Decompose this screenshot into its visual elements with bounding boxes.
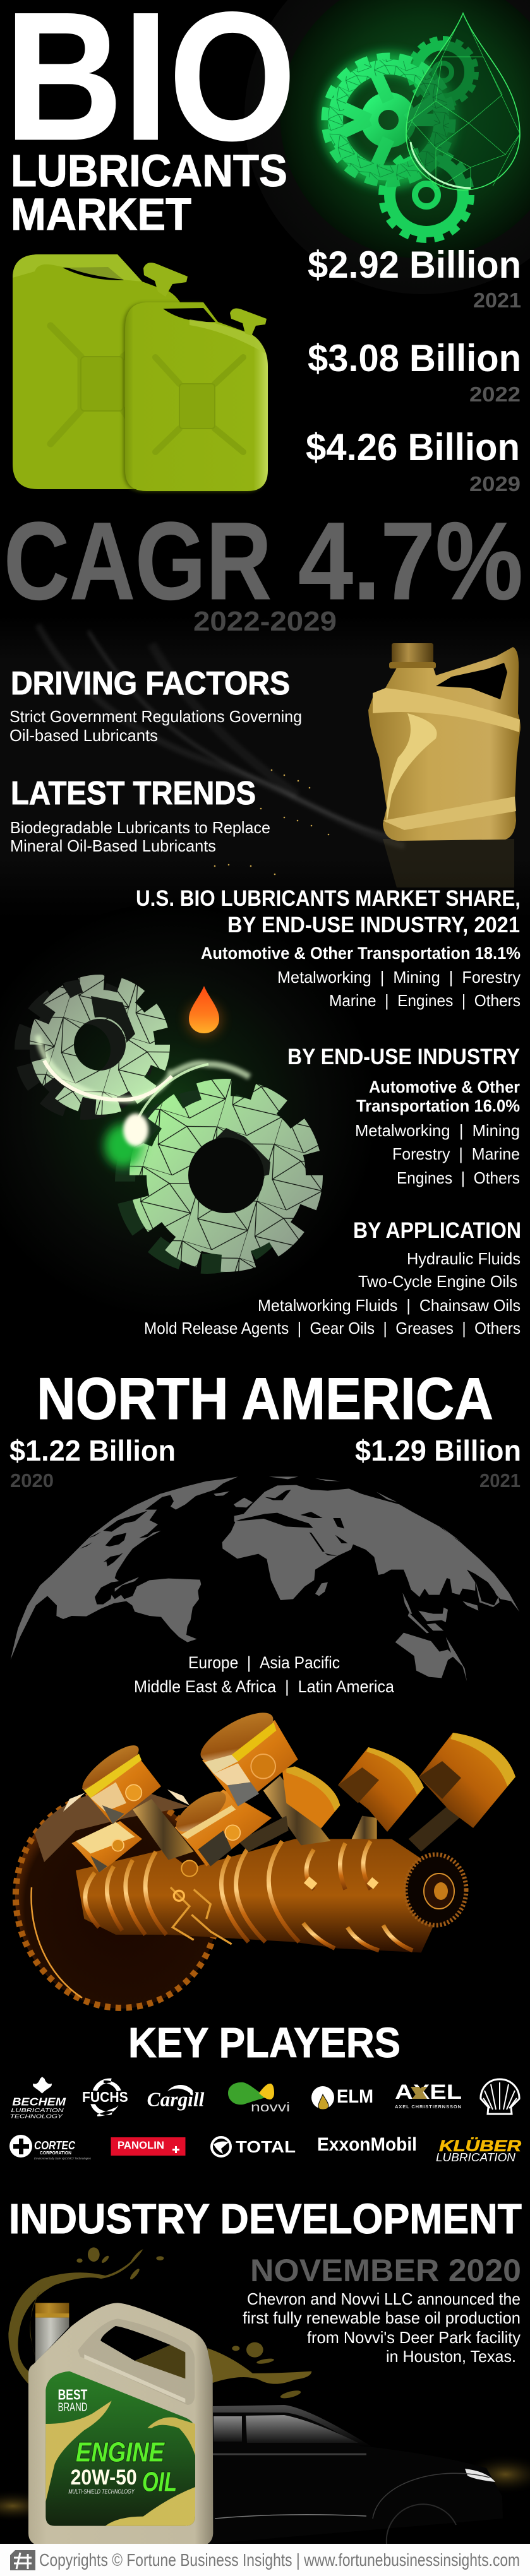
text: other regions: Middle East & Africa | Latin America [134,1677,395,1696]
logo: Kluber Lubrication: LUBRICATION [436,2151,516,2164]
market size 2022: 2022 [469,383,521,406]
decorative backdrop curtain [0,615,530,918]
panel: by end-use industry: Engines | Others [397,1168,520,1187]
bottle body [28,2303,213,2546]
CAGR period: 2022-2029 [193,606,337,637]
text: development description: in Houston, Texas. [386,2347,516,2366]
panel: driving factors: DRIVING FACTORS [11,665,290,702]
stat: North America 2020: $1.22 Billion [9,1434,176,1467]
piston centre [170,1784,272,1867]
logo: Kluber Lubrication [436,2137,521,2164]
logo: Shell [481,2079,519,2114]
logo: Cortec: CORTEC [34,2139,76,2152]
logo: Kluber Lubrication: KLÜBER [439,2137,521,2155]
text: November 2020: NOVEMBER 2020 [250,2253,521,2288]
logo: Bechem: TECHNOLOGY [10,2113,63,2119]
illustration: car silhouette [0,2405,530,2544]
logo: Cargill: Cargill [147,2088,204,2111]
market size 2022: $3.08 Billion [308,337,521,379]
logo: Total: TOTAL [236,2137,296,2156]
logo: Bechem [10,2077,66,2119]
text: development description [243,2289,521,2366]
text: U.S. share breakdown: Metalworking | Mining | Forestry [277,968,521,987]
crankshaft and connecting rods [76,1776,474,1952]
logo: ELM [311,2086,373,2110]
panel: by application: Hydraulic Fluids [407,1249,521,1268]
heading: U.S. market share [136,886,521,937]
piston small left [71,1821,142,1873]
logo: Fuchs: FUCHS [82,2089,128,2105]
bottle label: OIL [142,2467,177,2498]
panel: by end-use industry: Metalworking | Mining [355,1121,520,1140]
illustration: golden engine crankshaft and pistons [0,1704,515,2035]
text: U.S. share breakdown [201,944,521,1010]
panel: latest trends: LATEST TRENDS [11,775,256,812]
panel: by application: Two-Cycle Engine Oils [358,1272,517,1291]
panel: by application [144,1218,521,1338]
logo: ELM: ELM [337,2086,373,2107]
logo: Axel Christiernsson: AXEL CHRISTIERNSSON [395,2104,461,2110]
pistons [71,1704,515,1873]
glow and mesh gears backdrop [0,903,379,1319]
text: other regions: Europe | Asia Pacific [188,1653,340,1672]
text: development description: from Novvi's Deer Park facility [307,2328,521,2347]
illustration: gold oil bottle [368,643,521,887]
title: MARKET: MARKET [11,190,191,240]
logo: Cortec [9,2135,92,2160]
market size 2029: 2029 [469,472,521,496]
bottle label: MULTI-SHIELD TECHNOLOGY [68,2489,135,2496]
logo: ExxonMobil: ExxonMobil [317,2134,417,2155]
panel: latest trends: Biodegradable Lubricants to Replace [10,818,270,837]
panel: by end-use industry: Forestry | Marine [392,1144,520,1163]
panel: latest trends: Mineral Oil-Based Lubricants [10,836,216,855]
logo: Panolin: PANOLIN [117,2139,164,2151]
logo: Bechem: LUBRICATION [11,2108,64,2113]
panel: driving factors [9,665,302,745]
stat: North America 2021: $1.29 Billion [355,1434,521,1467]
illustration: glowing gears and oil drop [244,0,530,294]
piston far right B [419,1733,515,1828]
glowing arc highlight [38,1035,250,1167]
stat: North America 2020 [9,1434,176,1492]
panel: by end-use industry: Automotive & Other [369,1077,520,1096]
illustration: engine oil bottle with splash [8,2247,311,2546]
stat: North America 2020: 2020 [10,1469,54,1492]
bottle label: BRAND [58,2400,87,2413]
logo: Axel Christiernsson: AXEL [395,2080,462,2103]
illustration: small green jerry can [123,302,268,492]
sprocket disk [0,1766,246,2035]
bottle label: 20W-50 [71,2466,137,2490]
heading: North America: NORTH AMERICA [37,1365,493,1432]
logo: Novvi [228,2082,290,2115]
text: U.S. share breakdown: Marine | Engines | Others [329,991,521,1010]
piston top [194,1704,298,1807]
logo: Axel Christiernsson [395,2080,462,2110]
footer bar [0,2544,530,2576]
illustration: low-poly gear pair [15,975,323,1274]
market size 2021 [308,244,521,312]
market size 2021: 2021 [473,288,521,312]
bottle label [45,2371,195,2526]
piston left [76,1738,161,1824]
market size 2029: $4.26 Billion [306,426,520,468]
title: LUBRICANTS: LUBRICANTS [11,146,287,196]
stat: North America 2021: 2021 [479,1469,521,1492]
map: world globe [11,1476,519,1681]
market size 2021: $2.92 Billion [308,244,521,286]
market size 2022 [308,337,521,406]
piston far right A [338,1747,424,1832]
text: development description: first fully renewable base oil production [243,2308,521,2327]
logo: Cortec: CORPORATION [40,2151,71,2156]
oil splash [8,2247,311,2400]
bottle label: ENGINE [76,2437,165,2467]
bottle label: BEST [58,2387,87,2403]
CAGR heading: CAGR [4,500,272,623]
text: development description: Chevron and Novvi LLC announced the [247,2289,521,2308]
logo: Bechem: BECHEM [12,2096,66,2108]
panel: by end-use industry [287,1045,520,1187]
panel: latest trends [10,775,270,855]
panel: by end-use industry: Transportation 16.0% [356,1096,520,1115]
panel: driving factors: Strict Government Regulations Governing [9,707,302,726]
bottle cap and neck [35,2303,69,2363]
illustration: large green jerry can [13,254,190,489]
piston behind centre [282,1766,340,1829]
market size 2029 [306,426,521,496]
logo: Cortec: Environmentally Safe VpCI/MCI Technologies [34,2157,92,2160]
panel: by application: Metalworking Fluids | Chainsaw Oils [258,1296,521,1315]
end gear [406,1855,466,1925]
icon: orange oil drop [185,986,223,1038]
panel: driving factors: Oil-based Lubricants [9,726,158,745]
logo: Total [212,2137,296,2156]
logos: key players [9,2077,521,2164]
logo: Fuchs [82,2079,128,2116]
icon: Fortune Business Insights logo [10,2550,35,2570]
text: U.S. share breakdown: Automotive & Other Transportation 18.1% [201,944,521,963]
logo: Panolin [111,2137,186,2156]
stat: North America 2021 [355,1434,521,1492]
logo: Novvi: novvi [251,2101,290,2115]
CAGR heading [4,500,523,623]
text: other regions [134,1653,395,1696]
heading: Key Players: KEY PLAYERS [128,2019,401,2067]
